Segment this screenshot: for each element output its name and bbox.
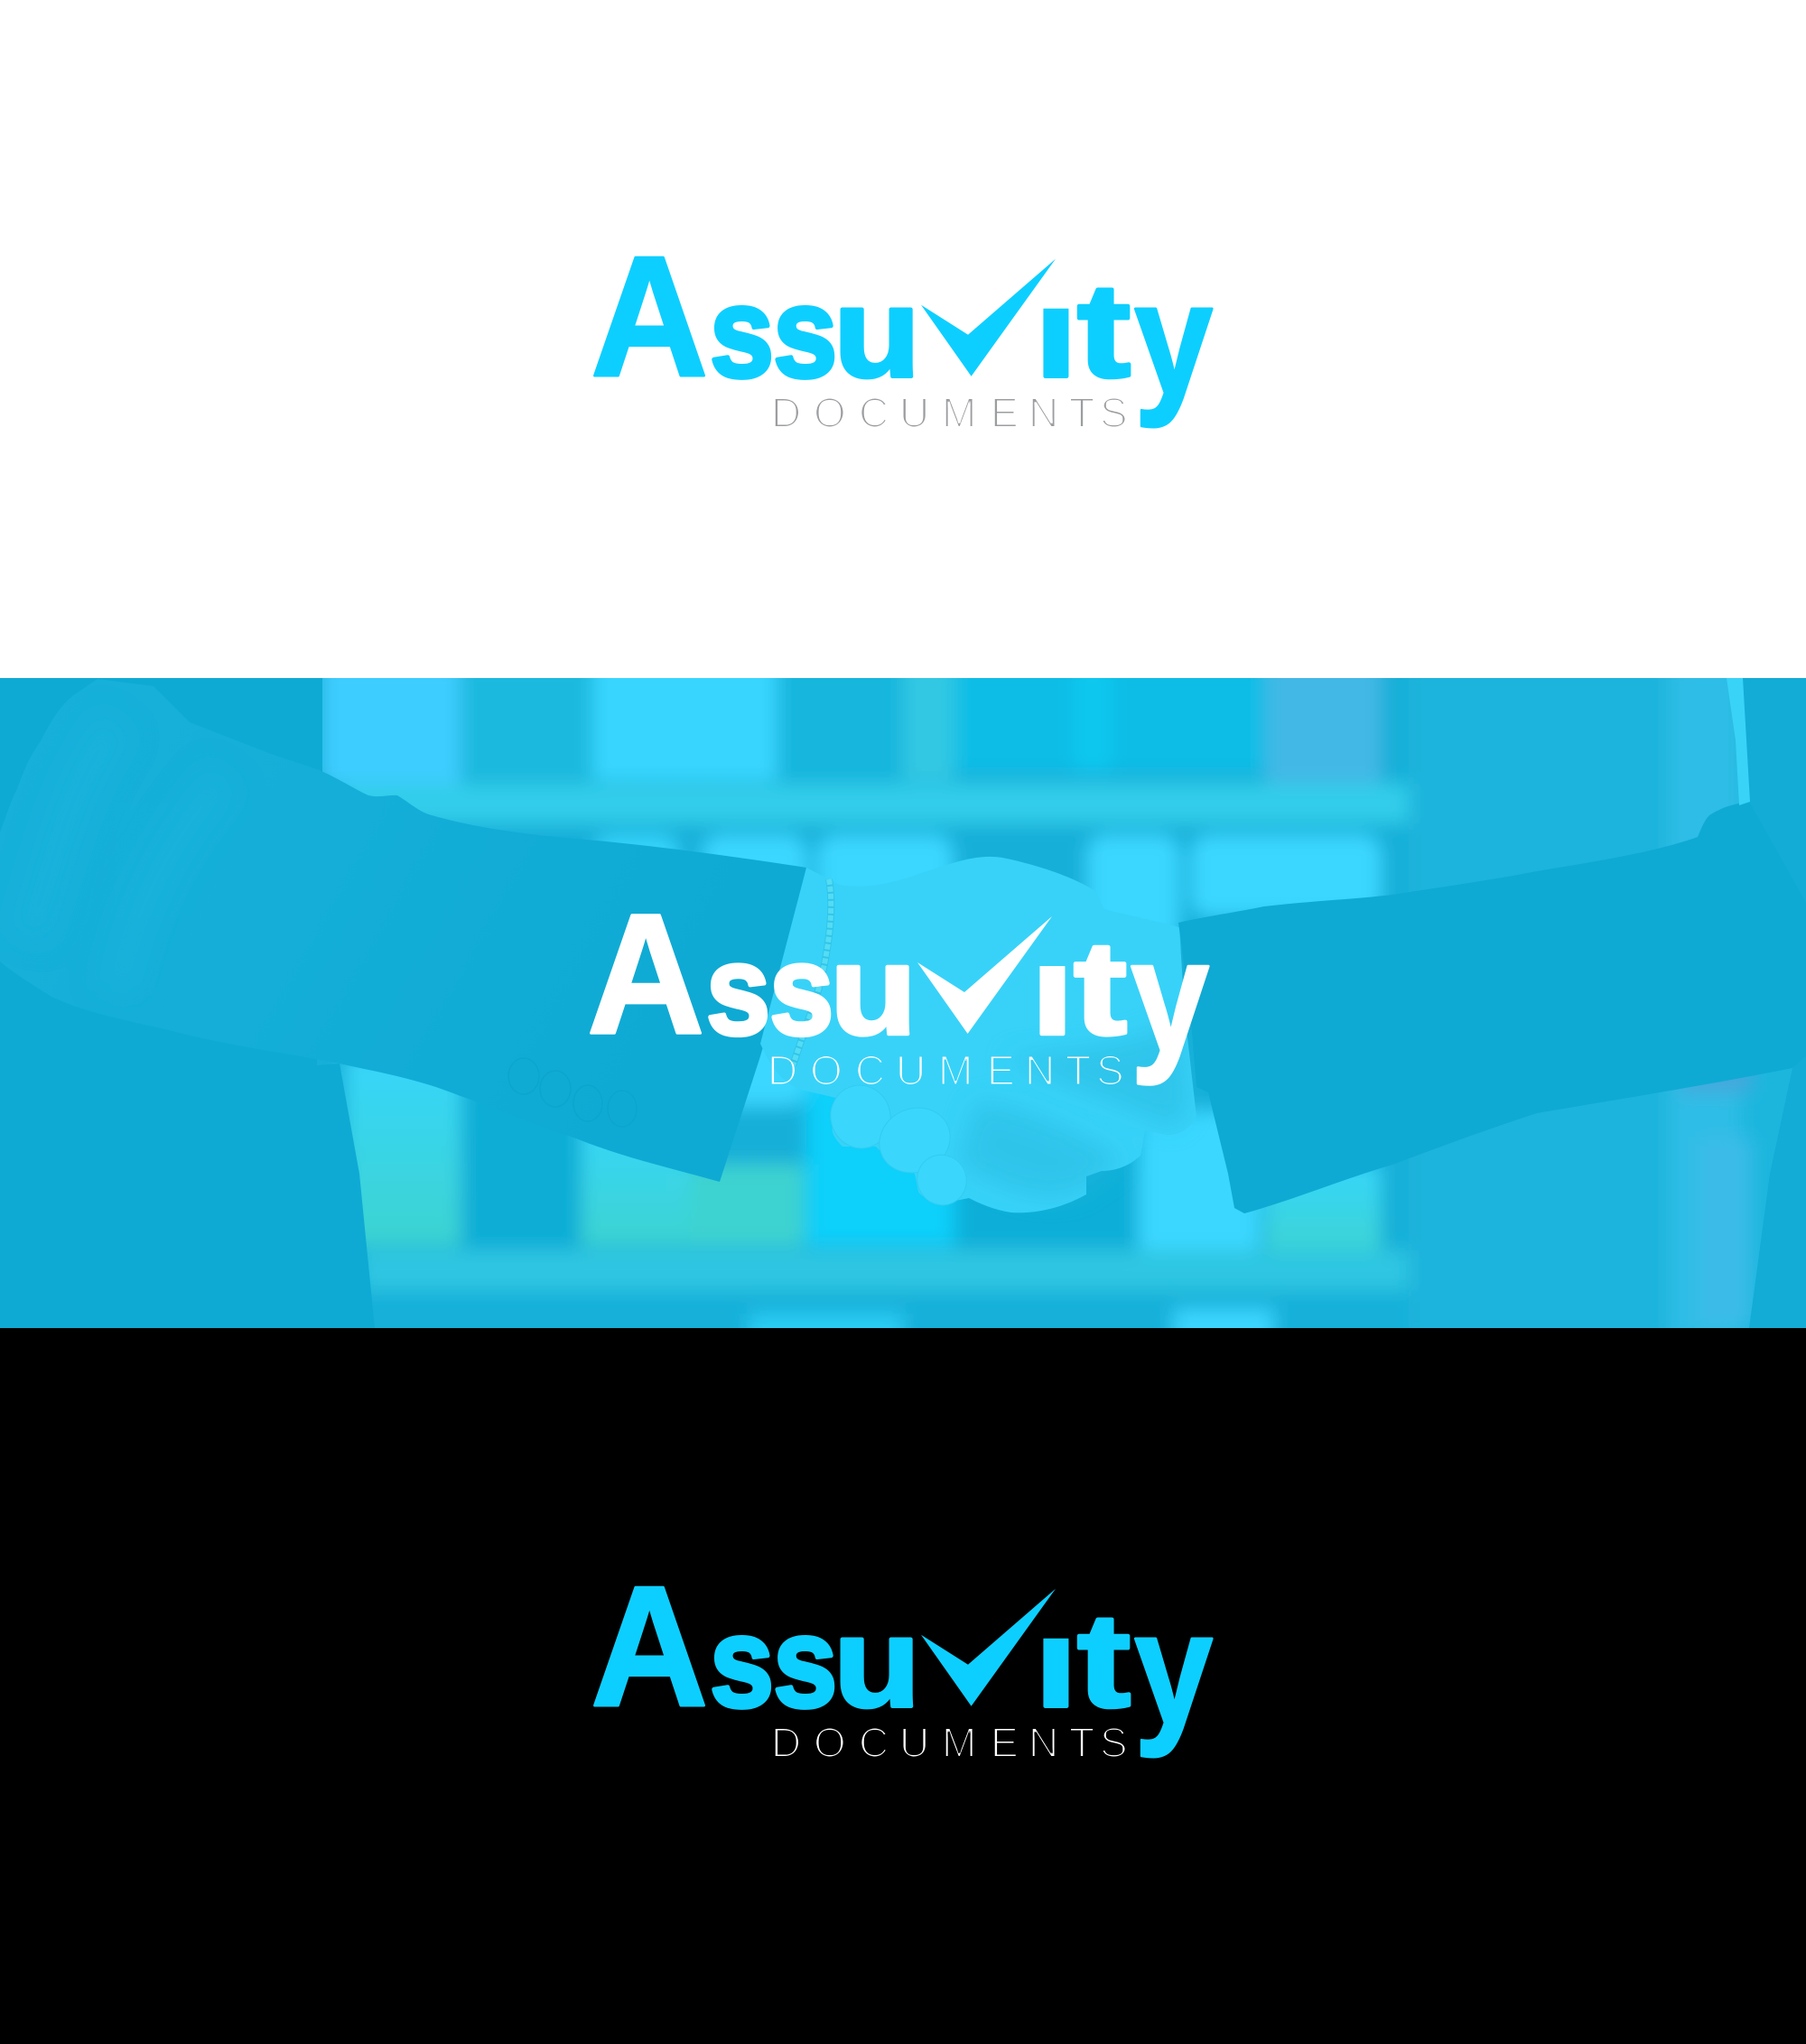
icon: sleeve buttons: [508, 1058, 637, 1127]
wordmark: Assu: u: [833, 1591, 920, 1733]
wordmark: Assu: ss: [710, 261, 837, 404]
wordmark: Assu: A: [591, 1551, 708, 1742]
subtitle: DOCUMENTS: DOCUMENTS: [771, 389, 1128, 436]
icon: check mark as V: [921, 259, 1056, 376]
handshake hands: [760, 857, 1196, 1214]
wordmark: ity: y: [1134, 248, 1213, 428]
wordmark: Assu: u: [833, 261, 920, 404]
blurred bookshelf background: [307, 659, 1752, 1350]
logo: middle on photo: [590, 914, 1210, 1086]
wordmark: Assu: [591, 1551, 920, 1742]
wordmark: ity: y: [1134, 1578, 1213, 1758]
wordmark: ity: [1043, 287, 1214, 428]
bottom black band: [0, 1328, 1806, 2044]
bright edge strip: [1727, 678, 1750, 805]
panel: blue handshake photo band: [0, 659, 1806, 1350]
wordmark: Assu: ss: [710, 1591, 837, 1733]
wordmark: ity: t: [1077, 256, 1131, 405]
sleeve fold highlights: [27, 722, 226, 993]
wordmark: Assu: [587, 878, 917, 1070]
left jacket sleeve: [0, 679, 806, 1182]
wordmark: Assu: A: [591, 221, 708, 413]
dark body of right figure: [1738, 678, 1806, 1328]
icon: check mark as V: [921, 1589, 1056, 1706]
wordmark: ity: t: [1074, 913, 1127, 1063]
wordmark: ity: t: [1077, 1585, 1131, 1735]
wordmark: ity: i: [1035, 1592, 1077, 1734]
logo: bottom on black: [593, 1585, 1214, 1759]
wordmark: ity: y: [1131, 906, 1209, 1086]
wordmark: ity: i: [1031, 920, 1074, 1062]
fingers: [830, 1085, 964, 1206]
right jacket sleeve: [1178, 802, 1806, 1213]
subtitle: DOCUMENTS: DOCUMENTS: [771, 1719, 1128, 1766]
hand shadow shading: [966, 1036, 1185, 1192]
wordmark: ity: i: [1035, 262, 1077, 404]
logo: top on white: [593, 256, 1214, 428]
bracelet: [793, 879, 831, 1065]
top white band: [0, 0, 1806, 678]
icon: check mark as V: [917, 916, 1052, 1034]
dark back of left figure: [0, 678, 375, 1328]
wordmark: Assu: ss: [706, 918, 833, 1062]
wordmark: ity: [1039, 944, 1210, 1086]
wordmark: Assu: u: [830, 918, 917, 1061]
wordmark: ity: [1043, 1618, 1214, 1759]
wordmark: Assu: [591, 221, 920, 413]
wordmark: Assu: A: [587, 878, 704, 1070]
subtitle: DOCUMENTS: DOCUMENTS: [768, 1046, 1124, 1093]
